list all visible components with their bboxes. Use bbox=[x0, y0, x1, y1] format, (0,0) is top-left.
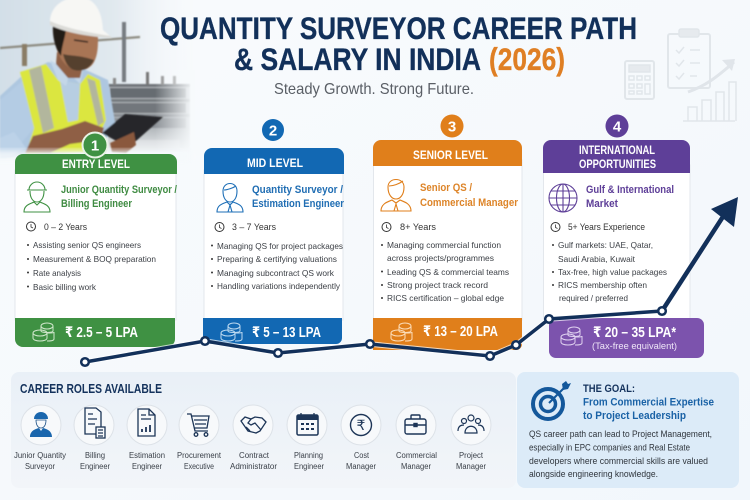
role labels: Junior Quantity bbox=[14, 451, 66, 460]
role labels: Manager bbox=[401, 462, 431, 471]
experience: 5+ Years Experience bbox=[568, 222, 645, 233]
international header: OPPORTUNITIES bbox=[579, 157, 656, 171]
role title: Junior Quantity Surveyor / bbox=[61, 184, 177, 196]
icon: team bbox=[458, 415, 484, 433]
goal body text bbox=[529, 429, 712, 479]
title: QUANTITY SURVEYOR CAREER PATH bbox=[160, 10, 637, 46]
role labels: Surveyor bbox=[25, 462, 55, 471]
duties list bbox=[211, 241, 343, 291]
goal body text: developers where commercial skills are valued bbox=[529, 456, 708, 466]
salary band: ₹ 5 – 13 LPA bbox=[252, 325, 321, 341]
duties list: RICS certification – global edge bbox=[387, 293, 504, 303]
icon: rupee bbox=[350, 414, 372, 436]
role labels: Commercial bbox=[396, 451, 437, 460]
experience: 3 – 7 Years bbox=[232, 222, 276, 233]
salary band: ₹ 13 – 20 LPA bbox=[423, 324, 498, 340]
icon: engineer bbox=[24, 182, 50, 212]
duties list: Managing QS for project packages bbox=[217, 241, 343, 251]
subtitle: Steady Growth. Strong Future. bbox=[274, 81, 474, 98]
photo: surveyor with tablet at construction site bbox=[0, 0, 205, 162]
international header bbox=[543, 140, 690, 173]
duties list: Measurement & BOQ preparation bbox=[33, 254, 156, 264]
duties list: Gulf markets: UAE, Qatar, bbox=[558, 240, 653, 250]
icon: billing bbox=[85, 408, 105, 438]
goal body text: alongside engineering knowledge. bbox=[529, 469, 658, 479]
mid header: MID LEVEL bbox=[247, 156, 303, 170]
role labels: Contract bbox=[239, 451, 270, 460]
goal heading bbox=[583, 383, 714, 422]
role labels: Billing bbox=[85, 451, 105, 460]
salary band bbox=[203, 318, 342, 344]
duties list: across projects/programmes bbox=[387, 253, 494, 263]
title: (2026) bbox=[489, 41, 565, 77]
icon: target bbox=[533, 381, 571, 419]
goal heading: From Commercial Expertise bbox=[583, 396, 714, 408]
roles heading: CAREER ROLES AVAILABLE bbox=[20, 382, 162, 396]
hi-vis vest bbox=[20, 64, 106, 154]
role icon circles bbox=[21, 405, 491, 445]
number badge 1: 1 bbox=[91, 138, 99, 154]
role labels: Planning bbox=[294, 451, 323, 460]
role labels: Estimation bbox=[129, 451, 165, 460]
mid header bbox=[204, 148, 344, 174]
experience bbox=[26, 222, 87, 233]
role title: Estimation Engineer bbox=[252, 198, 345, 210]
title: & SALARY IN INDIA bbox=[234, 41, 481, 77]
icon: professional bbox=[217, 184, 243, 212]
panel: the goal bbox=[517, 372, 739, 488]
duties list bbox=[27, 240, 156, 292]
goal body text: especially in EPC companies and Real Estate bbox=[529, 442, 690, 452]
number badge 1 bbox=[82, 132, 108, 158]
tablet bbox=[102, 114, 163, 142]
entry header bbox=[15, 154, 177, 174]
duties list: Handling variations independently bbox=[217, 281, 341, 291]
building bbox=[108, 72, 190, 152]
duties list bbox=[381, 240, 509, 303]
shirt bbox=[0, 62, 115, 158]
number badge 2: 2 bbox=[269, 122, 277, 140]
salary band: (Tax-free equivalent) bbox=[592, 341, 677, 351]
role labels: Manager bbox=[346, 462, 376, 471]
neck bbox=[56, 52, 84, 78]
role title: Billing Engineer bbox=[61, 198, 133, 210]
senior header: SENIOR LEVEL bbox=[413, 148, 488, 162]
face bbox=[56, 28, 98, 71]
number badge 3 bbox=[440, 114, 464, 138]
role labels: Engineer bbox=[132, 462, 162, 471]
role title: Quantity Surveyor / bbox=[252, 184, 343, 196]
duties list bbox=[552, 240, 667, 303]
role labels: Engineer bbox=[294, 462, 324, 471]
icon: handshake bbox=[241, 417, 266, 433]
icon: junior QS bbox=[30, 412, 52, 437]
duties list: Preparing & certifying valuations bbox=[217, 254, 337, 264]
role labels: Engineer bbox=[80, 462, 110, 471]
duties list: Saudi Arabia, Kuwait bbox=[558, 254, 636, 264]
panel: entry level card bbox=[15, 132, 177, 347]
salary band bbox=[15, 318, 175, 347]
senior header bbox=[373, 140, 522, 166]
international header: INTERNATIONAL bbox=[579, 143, 655, 157]
experience: 0 – 2 Years bbox=[44, 222, 87, 233]
panel: senior level card bbox=[373, 114, 522, 350]
experience bbox=[382, 222, 436, 233]
duties list: Managing commercial function bbox=[387, 240, 501, 250]
duties list: RICS membership often bbox=[558, 280, 647, 290]
role labels: Project bbox=[459, 451, 484, 460]
duties list: Leading QS & commercial teams bbox=[387, 267, 509, 277]
entry header: ENTRY LEVEL bbox=[62, 157, 130, 171]
growth arrow line bbox=[81, 197, 738, 366]
role title bbox=[252, 184, 345, 210]
duties list: Strong project track record bbox=[387, 280, 488, 290]
number badge 3: 3 bbox=[448, 118, 456, 136]
role title: Market bbox=[586, 198, 618, 210]
role title: Commercial Manager bbox=[420, 197, 519, 209]
role labels: Administrator bbox=[230, 462, 277, 471]
crane bbox=[0, 22, 140, 82]
panel: career roles available bbox=[11, 372, 516, 488]
icon: manager bbox=[381, 180, 411, 211]
salary band: ₹ 20 – 35 LPA* bbox=[593, 325, 676, 341]
number badge 4 bbox=[606, 114, 628, 138]
icon: calendar bbox=[297, 413, 318, 435]
experience: 8+ Years bbox=[400, 222, 436, 233]
role title bbox=[420, 182, 519, 209]
salary band bbox=[549, 318, 704, 358]
hard hat bbox=[50, 0, 110, 36]
goal body text: QS career path can lead to Project Management, bbox=[529, 429, 712, 439]
icon: briefcase bbox=[405, 415, 426, 434]
duties list: Managing subcontract QS work bbox=[217, 268, 335, 278]
goal heading: to Project Leadership bbox=[583, 410, 686, 422]
role labels: Executive bbox=[184, 462, 214, 471]
goal heading: THE GOAL: bbox=[583, 383, 635, 395]
icon: estimation bbox=[138, 409, 155, 436]
duties list: Basic billing work bbox=[33, 282, 97, 292]
title bbox=[160, 10, 637, 77]
panel: mid level card bbox=[203, 119, 345, 344]
duties list: Tax-free, high value packages bbox=[558, 267, 667, 277]
role title: Gulf & International bbox=[586, 184, 674, 196]
role title bbox=[586, 184, 674, 210]
number badge 4: 4 bbox=[613, 118, 622, 136]
icon: cart bbox=[187, 414, 209, 436]
role labels: Manager bbox=[456, 462, 486, 471]
role labels bbox=[14, 451, 486, 471]
panel: international card bbox=[543, 114, 704, 358]
duties list: Rate analysis bbox=[33, 268, 81, 278]
role title: Senior QS / bbox=[420, 182, 472, 194]
role labels: Cost bbox=[354, 451, 370, 460]
salary band bbox=[373, 318, 522, 350]
role title bbox=[61, 184, 177, 210]
experience bbox=[215, 222, 276, 233]
number badge 2 bbox=[262, 119, 284, 141]
arm and hand bbox=[0, 132, 26, 158]
icon: globe bbox=[549, 184, 577, 212]
duties list: required / preferred bbox=[559, 293, 628, 303]
role labels: Procurement bbox=[177, 451, 222, 460]
salary band: ₹ 2.5 – 5 LPA bbox=[65, 325, 138, 341]
icon: rupee: ₹ bbox=[357, 417, 366, 433]
duties list: Assisting senior QS engineers bbox=[33, 240, 141, 250]
decorative icons: clipboard, calculator, chart bbox=[625, 29, 736, 121]
